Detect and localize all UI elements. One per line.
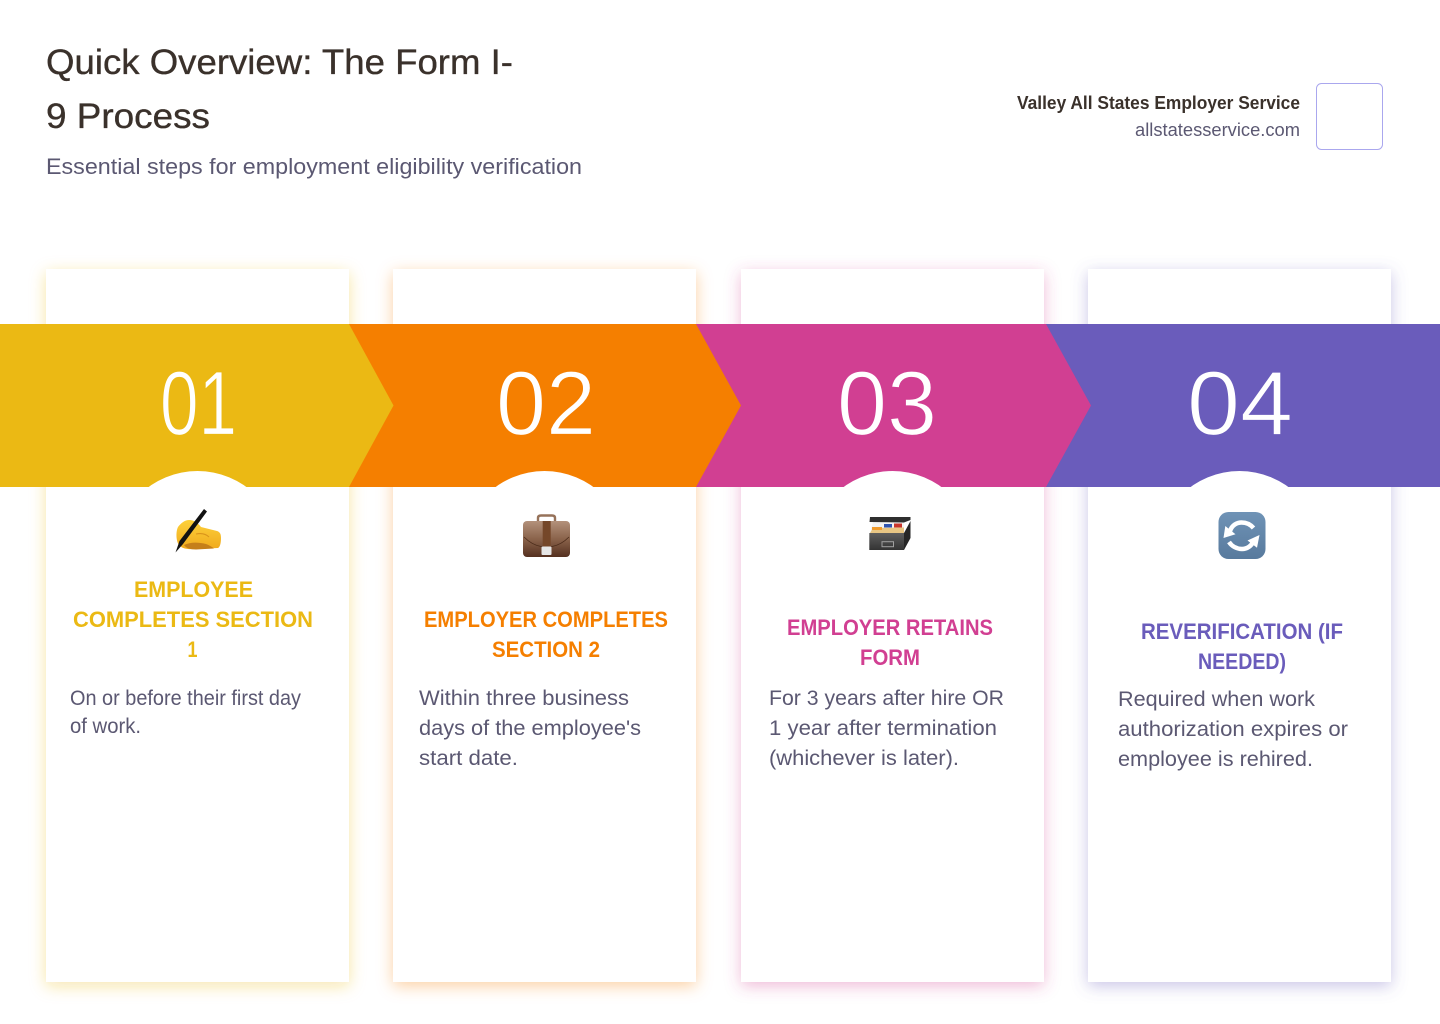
heading: EMPLOYER COMPLETES [424, 607, 668, 632]
description: Within three business [419, 686, 629, 710]
description: authorization expires or [1118, 717, 1348, 741]
header: title block [46, 43, 582, 179]
heading: NEEDED) [1198, 649, 1286, 674]
card 1 [46, 269, 349, 982]
step 4 content [1118, 512, 1348, 771]
description: (whichever is later). [769, 746, 959, 770]
step 2 content [419, 516, 668, 770]
description: days of the employee's [419, 716, 641, 740]
description: On or before their first day [70, 686, 301, 710]
heading: REVERIFICATION (IF [1141, 619, 1343, 644]
description [1118, 687, 1348, 771]
number 02: 02 [496, 354, 596, 454]
icon: refresh arrows [1218, 512, 1266, 559]
heading: SECTION 2 [492, 637, 600, 662]
description: start date. [419, 746, 518, 770]
title [46, 43, 513, 136]
number 01: 01 [160, 354, 237, 454]
description: 1 year after termination [769, 716, 997, 740]
step cards [46, 269, 1391, 982]
step 1 content [70, 509, 313, 738]
step 3 content [769, 517, 1004, 770]
arrow band [0, 324, 1440, 487]
heading: EMPLOYEE [134, 577, 253, 602]
card 4 [1088, 269, 1391, 982]
heading: FORM [860, 645, 920, 670]
header: company branding [1017, 84, 1382, 150]
description [769, 686, 1004, 770]
title: Quick Overview: The Form I- [46, 43, 513, 82]
logo placeholder [1316, 84, 1382, 150]
icon: writing hand [176, 509, 221, 552]
company name: Valley All States Employer Service [1017, 92, 1300, 113]
white tabs above the icons [114, 471, 1322, 637]
description: employee is rehired. [1118, 747, 1313, 771]
number 03: 03 [837, 354, 937, 454]
heading [1141, 619, 1343, 674]
subtitle: Essential steps for employment eligibility verification [46, 154, 582, 179]
company website: allstatesservice.com [1135, 120, 1300, 140]
heading: EMPLOYER RETAINS [787, 615, 993, 640]
heading: 1 [188, 637, 198, 662]
arrow 4 [1046, 324, 1440, 487]
title: 9 Process [46, 97, 210, 136]
icon: card file box [869, 517, 910, 550]
description: of work. [70, 714, 141, 738]
heading [424, 607, 668, 662]
description [70, 686, 301, 738]
arrow 2 [349, 324, 741, 487]
arrow 3 [696, 324, 1091, 487]
heading [787, 615, 993, 670]
heading [73, 577, 313, 662]
heading: COMPLETES SECTION [73, 607, 313, 632]
description: Required when work [1118, 687, 1315, 711]
number 04: 04 [1187, 354, 1293, 454]
description [419, 686, 641, 770]
card 3 [741, 269, 1044, 982]
arrow 1 [0, 324, 394, 487]
card 2 [393, 269, 696, 982]
icon: briefcase [523, 516, 570, 557]
description: For 3 years after hire OR [769, 686, 1004, 710]
